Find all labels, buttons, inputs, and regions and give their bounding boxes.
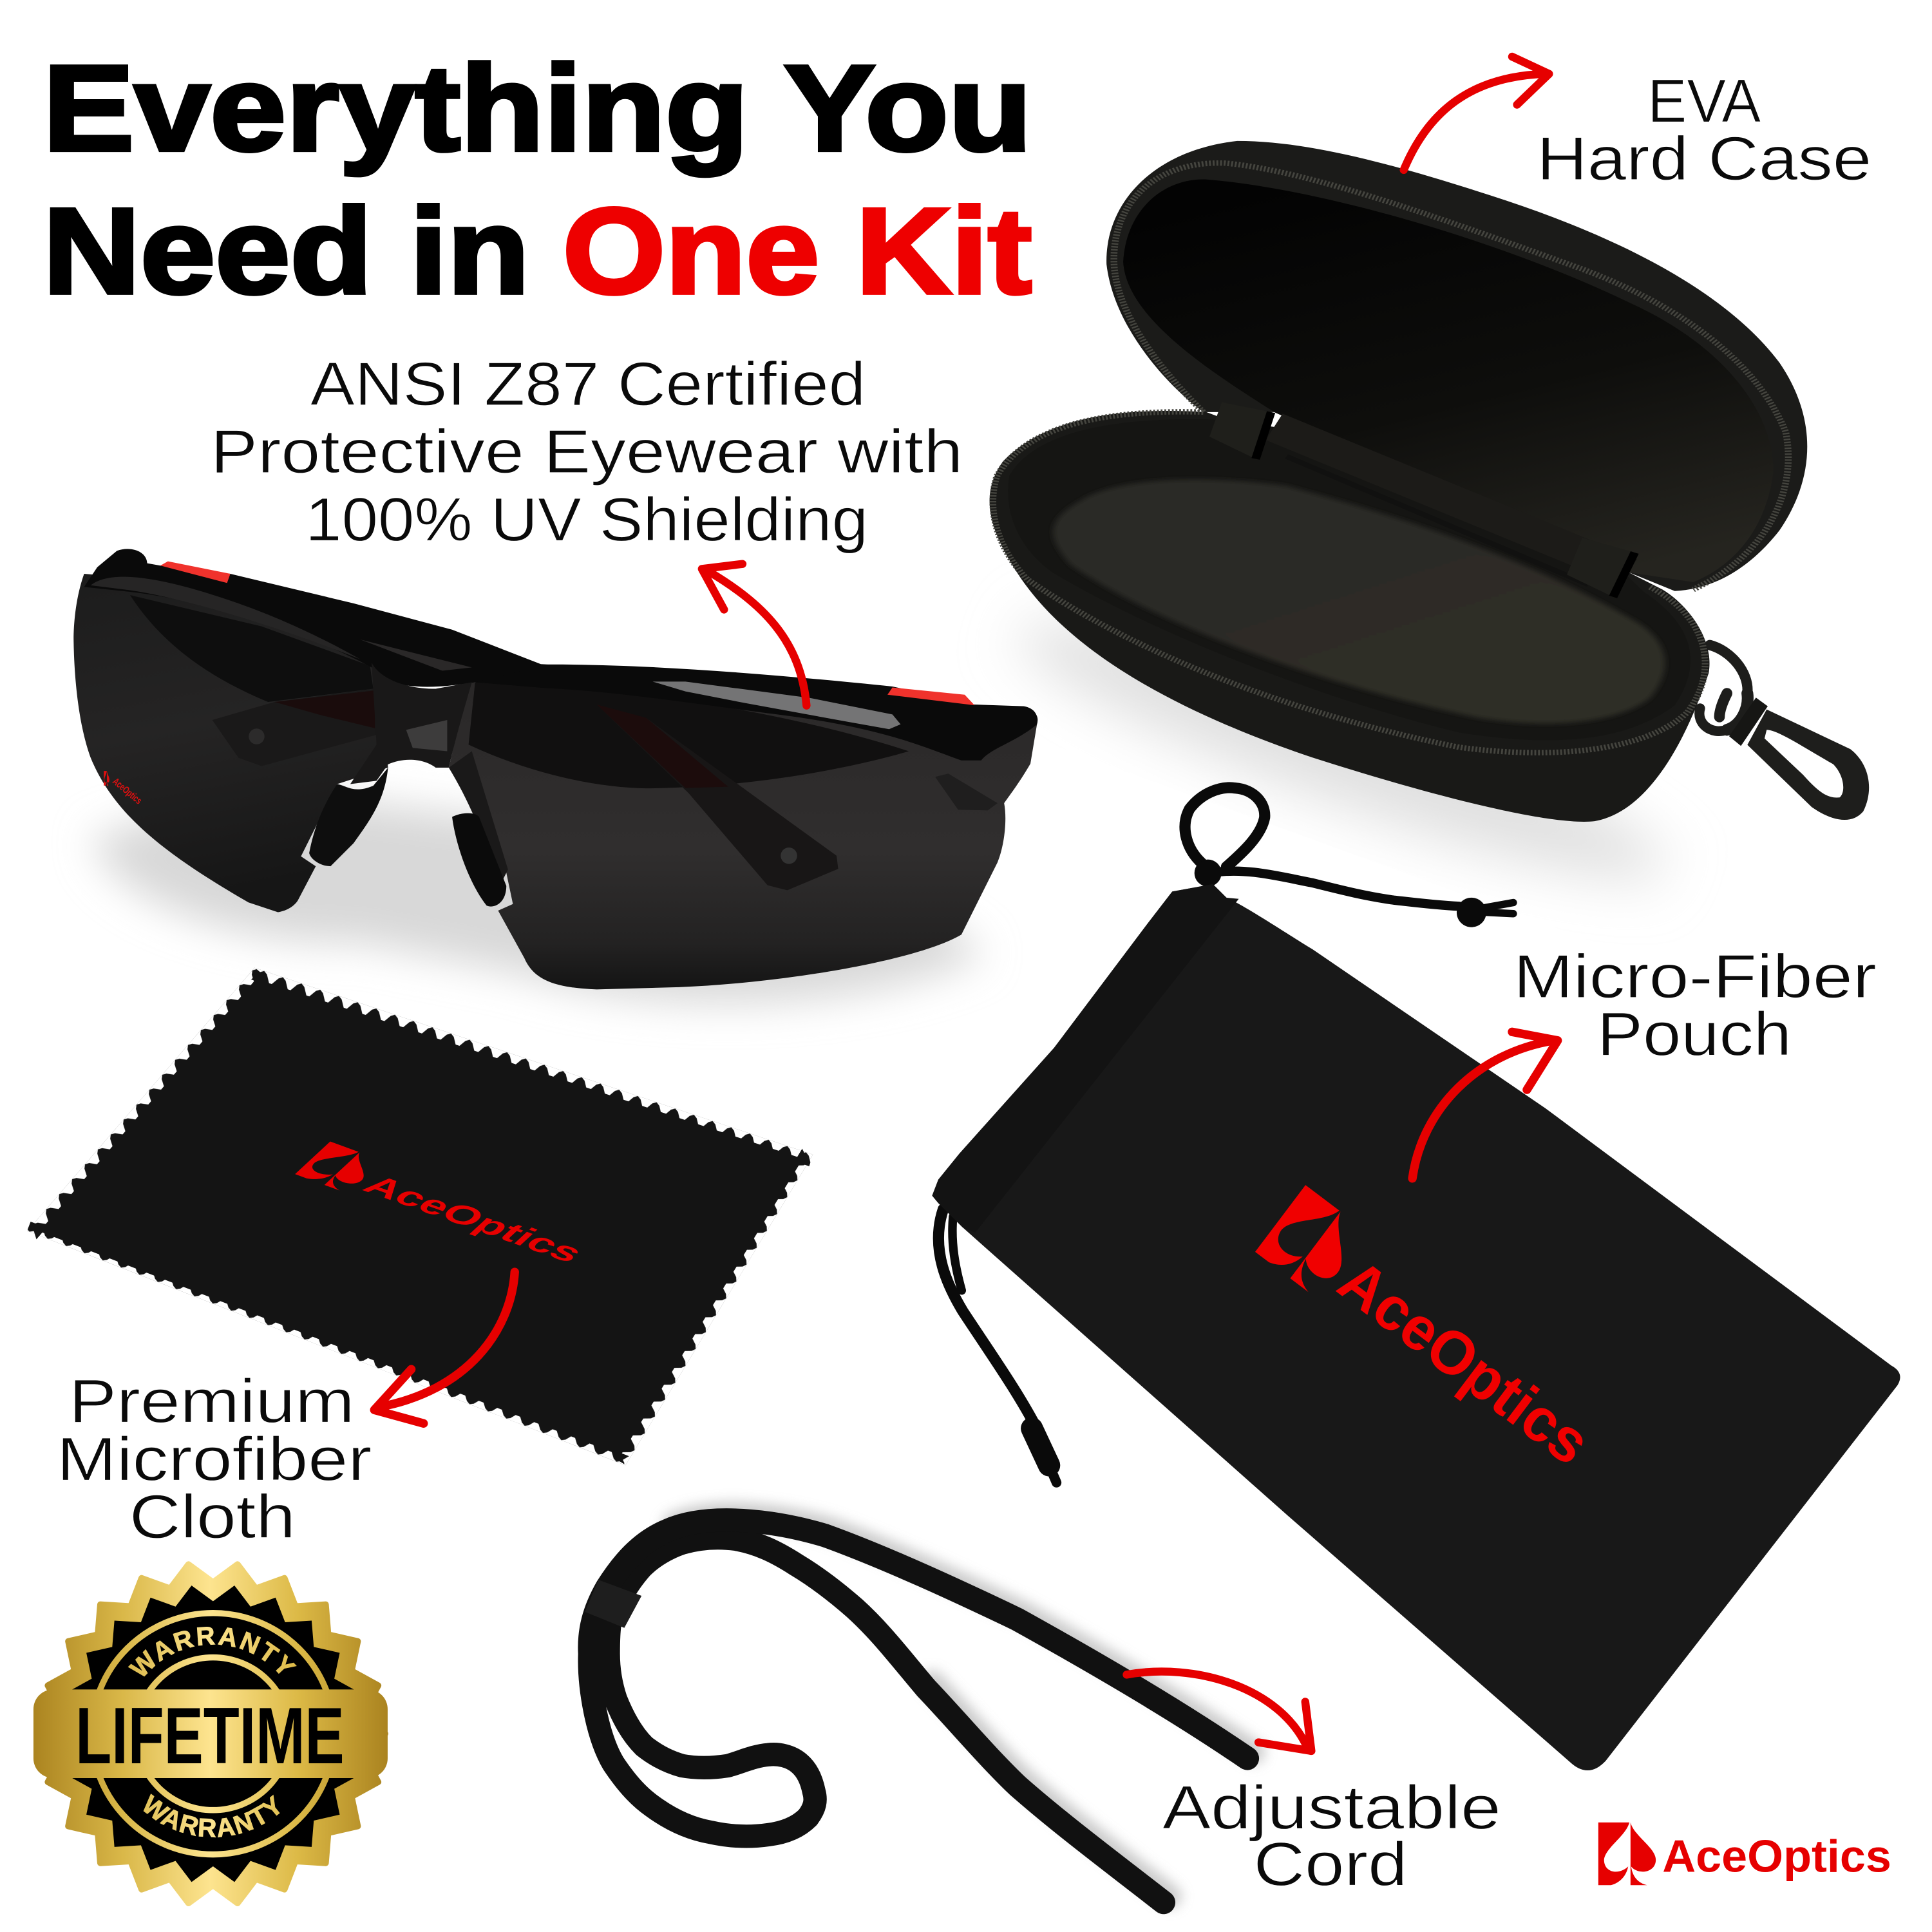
safety glasses xyxy=(73,549,1037,989)
micro-fiber pouch xyxy=(932,788,1900,1770)
cord stopper xyxy=(585,1580,641,1628)
frame: left brow and temple xyxy=(84,549,547,688)
badge text: warranty top: WARRANTY xyxy=(128,1627,297,1677)
pouch logo xyxy=(1255,1185,1603,1478)
hard case xyxy=(990,141,1807,822)
nose pads xyxy=(309,768,388,866)
label: pouch: Pouch xyxy=(1597,1000,1792,1069)
badge banner xyxy=(33,1689,388,1778)
lifetime warranty badge xyxy=(33,1561,388,1906)
right lens xyxy=(449,682,1037,989)
label: microfiber cloth: Premium xyxy=(69,1367,355,1435)
lens brand mark xyxy=(104,771,144,806)
badge text: warranty bottom: WARRANTY xyxy=(143,1794,280,1838)
nose bridge xyxy=(350,663,472,784)
title: One Kit xyxy=(563,184,1032,319)
label: cord: Adjustable xyxy=(1162,1773,1501,1842)
adjustable cord xyxy=(585,1520,1247,1902)
label: ANSI Z87 eyewear: Protective Eyewear with xyxy=(211,417,963,486)
pouch logo: AceOptics xyxy=(1326,1246,1603,1478)
pouch body xyxy=(932,884,1900,1770)
microfiber cloth xyxy=(27,967,813,1465)
shadow: cord xyxy=(674,1514,1253,1897)
brand logo xyxy=(1598,1823,1891,1885)
label: EVA hard case: Hard Case xyxy=(1537,124,1871,193)
label: microfiber cloth: Cloth xyxy=(129,1482,296,1551)
shadow: hard case xyxy=(1001,585,1684,918)
lens brand mark: AceOptics xyxy=(110,776,144,806)
arrow: cord xyxy=(1127,1672,1311,1751)
label: EVA hard case: EVA xyxy=(1647,66,1761,135)
temple arm seen through lens xyxy=(597,705,838,890)
hinge straps xyxy=(1209,402,1271,459)
arrow: EVA hard case xyxy=(1404,57,1549,170)
left lens xyxy=(73,574,388,912)
right lens dark band xyxy=(469,682,909,788)
label: cord: Cord xyxy=(1253,1830,1407,1899)
title: Need in xyxy=(43,184,529,319)
badge text: lifetime: LIFETIME xyxy=(75,1691,345,1781)
frame reflection left xyxy=(91,577,360,659)
arrow: pouch xyxy=(1412,1032,1558,1179)
cloth logo xyxy=(295,1141,592,1268)
label: cord xyxy=(1162,1773,1501,1899)
red tabs xyxy=(160,562,231,583)
label: pouch xyxy=(1513,942,1877,1069)
case body xyxy=(990,411,1710,822)
brand logo: AceOptics xyxy=(1662,1830,1891,1881)
label: pouch: Micro-Fiber xyxy=(1513,942,1877,1011)
pouch hem xyxy=(932,884,1239,1233)
pinked edges xyxy=(251,968,813,1166)
left lens dark zone xyxy=(130,595,374,702)
label: microfiber cloth: Microfiber xyxy=(57,1425,372,1493)
arrow: cloth xyxy=(374,1272,515,1423)
snap hook xyxy=(1700,645,1869,820)
label: ANSI Z87 eyewear: 100% UV Shielding xyxy=(305,485,868,554)
temple reflection left xyxy=(213,689,377,766)
arrow: ANSI eyewear xyxy=(702,564,806,706)
shadow: safety glasses xyxy=(92,788,985,1003)
label: EVA hard case xyxy=(1537,66,1871,193)
title: Everything You xyxy=(43,41,1032,176)
case lid xyxy=(1106,141,1807,591)
pouch cords xyxy=(938,788,1513,1482)
label: ANSI Z87 eyewear: ANSI Z87 Certified xyxy=(310,350,866,419)
label: ANSI Z87 eyewear xyxy=(211,350,963,554)
frame: right brow xyxy=(475,665,1037,761)
title xyxy=(43,41,1032,319)
label: microfiber cloth xyxy=(57,1367,372,1551)
cloth logo: AceOptics xyxy=(356,1170,592,1268)
brow highlight xyxy=(652,681,900,729)
